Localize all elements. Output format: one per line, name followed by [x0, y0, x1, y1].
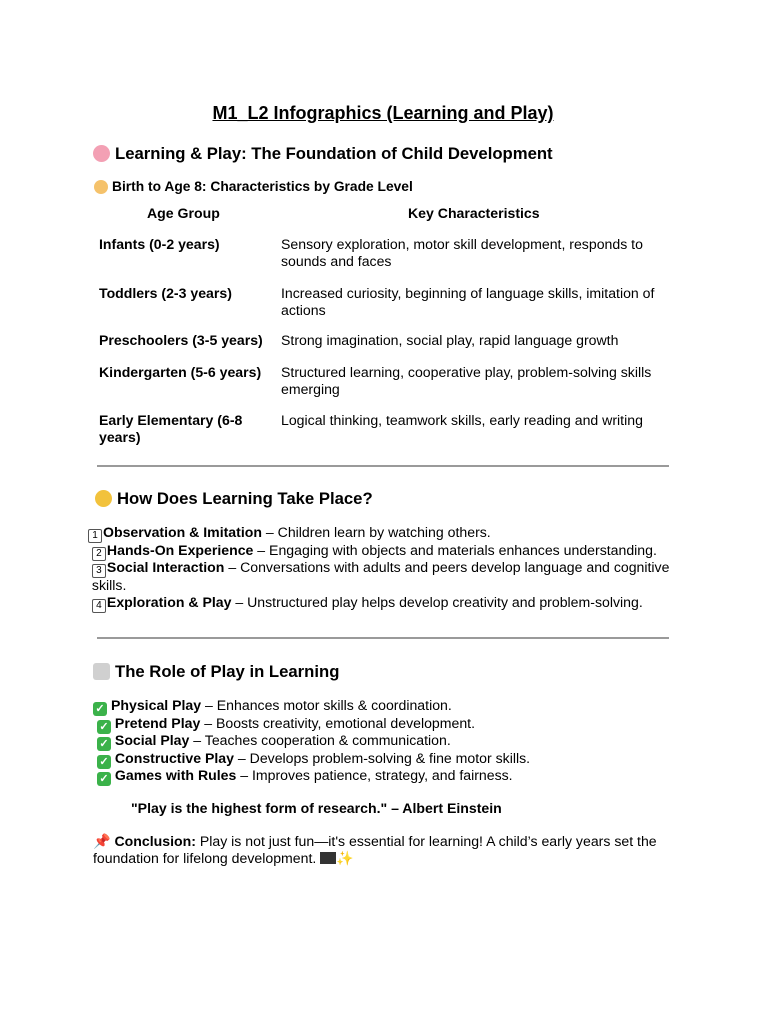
- table: age groups: Logical thinking, teamwork skills, early reading and writing: [281, 412, 643, 428]
- table: age groups: Structured learning, cooperative play, problem-solving skills: [281, 364, 651, 380]
- list: learning methods: Exploration & Play – Unstructured play helps develop creativity and problem-solving.: [107, 594, 643, 610]
- list: learning methods: 1: [92, 530, 98, 541]
- conclusion: foundation for lifelong development. ✨: [93, 850, 354, 866]
- list: play types: Social Play – Teaches cooperation & communication.: [115, 732, 451, 748]
- list: play types: ✓: [99, 773, 109, 785]
- list: learning methods: skills.: [92, 576, 126, 592]
- table: age groups: Kindergarten (5-6 years): [99, 364, 261, 380]
- list: learning methods: [88, 524, 669, 613]
- list: learning methods: Hands-On Experience – Engaging with objects and materials enhances understanding.: [107, 542, 657, 558]
- table: age groups: Strong imagination, social play, rapid language growth: [281, 332, 618, 348]
- list: play types: ✓: [95, 703, 105, 715]
- table: age groups: Increased curiosity, beginning of language skills, imitation of: [281, 285, 654, 301]
- list: play types: Pretend Play – Boosts creativity, emotional development.: [115, 714, 475, 730]
- table: age groups: Early Elementary (6-8: [99, 412, 242, 428]
- list: learning methods: Observation & Imitation – Children learn by watching others.: [103, 524, 491, 540]
- table: age groups: Preschoolers (3-5 years): [99, 332, 263, 348]
- heading: learning and play: Learning & Play: The Foundation of Child Development: [115, 144, 553, 163]
- table: age groups: Age Group: [147, 205, 220, 221]
- conclusion: [93, 833, 657, 866]
- title: M1_L2 Infographics (Learning and Play): [212, 103, 554, 123]
- list: learning methods: 4: [96, 600, 102, 611]
- list: learning methods: Social Interaction – Conversations with adults and peers develop language and cognitive: [107, 559, 669, 575]
- quote: "Play is the highest form of research." – Albert Einstein: [131, 800, 502, 816]
- list: play types: [93, 697, 530, 786]
- list: play types: Physical Play – Enhances motor skills & coordination.: [111, 697, 452, 713]
- list: play types: Constructive Play – Develops problem-solving & fine motor skills.: [115, 750, 530, 766]
- heading: role of play: The Role of Play in Learning: [115, 662, 339, 681]
- table: age groups: sounds and faces: [281, 253, 391, 269]
- heading: how does learning take place: How Does Learning Take Place?: [117, 489, 373, 508]
- list: learning methods: 3: [96, 565, 102, 576]
- table: age groups: actions: [281, 302, 326, 318]
- list: play types: ✓: [99, 720, 109, 732]
- table: age groups: [99, 205, 654, 445]
- table: age groups: Sensory exploration, motor skill development, responds to: [281, 236, 643, 252]
- table: age groups: Infants (0-2 years): [99, 236, 220, 252]
- list: play types: ✓: [99, 738, 109, 750]
- list: learning methods: 2: [96, 548, 102, 558]
- list: play types: ✓: [99, 756, 109, 768]
- subheading: birth to age 8: Birth to Age 8: Characteristics by Grade Level: [112, 179, 413, 194]
- table: age groups: emerging: [281, 381, 340, 397]
- table: age groups: years): [99, 429, 141, 445]
- table: age groups: Toddlers (2-3 years): [99, 285, 232, 301]
- list: play types: Games with Rules – Improves patience, strategy, and fairness.: [115, 767, 513, 783]
- conclusion: 📌 Conclusion: Play is not just fun—it's essential for learning! A child’s early years set the: [93, 833, 657, 849]
- table: age groups: Key Characteristics: [408, 205, 540, 221]
